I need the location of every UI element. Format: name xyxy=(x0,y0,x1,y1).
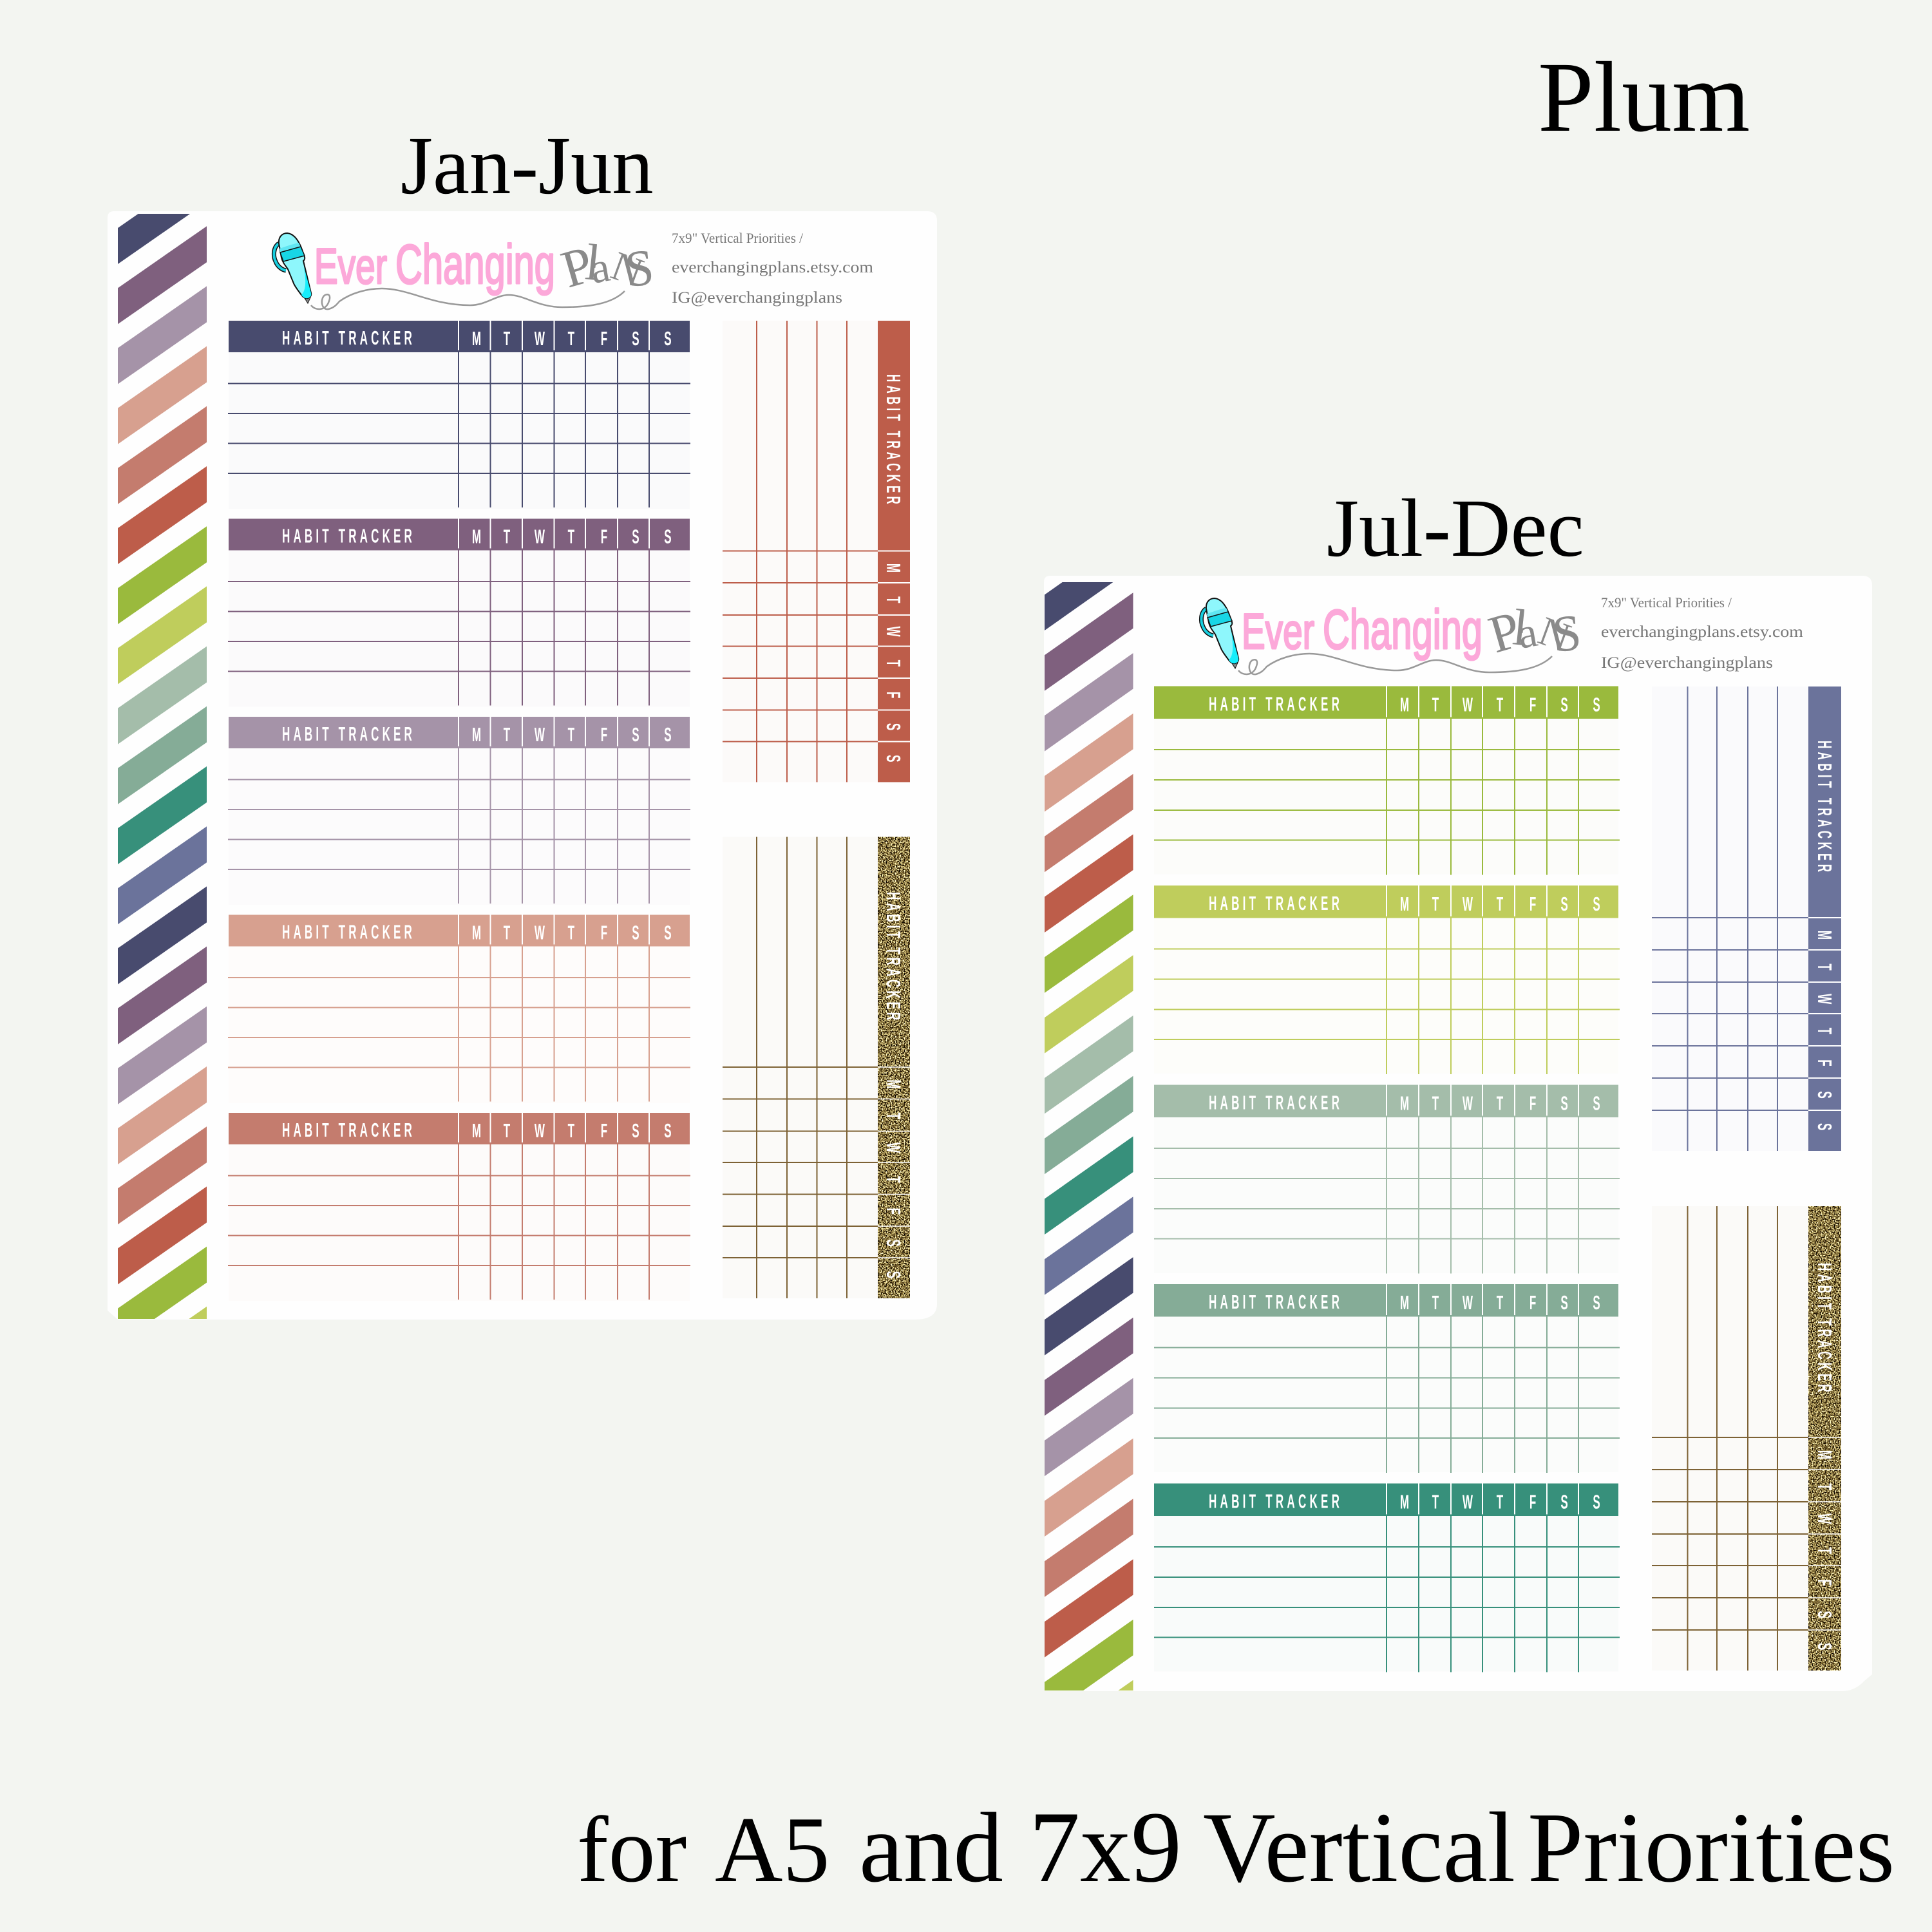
shop info text: everchangingplans.etsy.com xyxy=(672,259,874,276)
habit table: mauve: MTWTFSS xyxy=(472,724,672,746)
vertical habit tracker: slate: MTWTFSS xyxy=(1814,931,1835,1130)
heading: Jan-Jun: Jan-Jun xyxy=(401,119,654,211)
footer caption: Priorities xyxy=(1528,1792,1895,1903)
vertical habit tracker: gold glitter xyxy=(723,837,910,1298)
habit table: rose xyxy=(228,1113,690,1301)
shop info text: everchangingplans.etsy.com xyxy=(1601,623,1804,641)
habit table: sea green: MTWTFSS xyxy=(1400,1292,1600,1314)
habit table: teal: HABIT TRACKER xyxy=(1209,1490,1340,1513)
habit table: plum xyxy=(228,519,690,707)
habit table: sea green: HABIT TRACKER xyxy=(1209,1291,1340,1313)
habit table: navy: MTWTFSS xyxy=(472,328,672,350)
vertical habit tracker: red: HABIT TRACKER xyxy=(882,374,904,504)
habit table: green: MTWTFSS xyxy=(1400,694,1600,716)
shop info text: IG@everchangingplans xyxy=(1601,654,1773,672)
shop info text xyxy=(672,230,874,307)
logo word: Plans: a xyxy=(587,243,613,293)
habit table: blush xyxy=(228,914,690,1103)
shop info text: 7x9" Vertical Priorities / xyxy=(1601,594,1732,611)
logo swoosh xyxy=(1238,654,1552,674)
logo word: Ever: Ever xyxy=(1242,603,1314,659)
diagonal stripe column xyxy=(118,214,207,1319)
title: Plum: Plum xyxy=(1538,41,1750,153)
vertical habit tracker: gold glitter: HABIT TRACKER xyxy=(1814,1263,1835,1392)
habit table: mauve: HABIT TRACKER xyxy=(282,723,412,745)
logo word: Plans: P xyxy=(1482,600,1527,664)
vertical habit tracker: slate xyxy=(1652,687,1841,1151)
logo: Ever Changing Plans xyxy=(1201,598,1584,674)
habit table: navy: HABIT TRACKER xyxy=(282,327,412,349)
logo word: Ever: Ever xyxy=(314,238,387,294)
vertical habit tracker: gold glitter: MTWTFSS xyxy=(1814,1450,1835,1650)
logo word: Plans: P xyxy=(555,234,600,299)
habit table: sea green xyxy=(1154,1284,1620,1473)
habit table: blush: MTWTFSS xyxy=(472,922,672,944)
habit table: rose: MTWTFSS xyxy=(472,1120,672,1142)
shop info text xyxy=(1601,594,1804,672)
footer caption: 7x9 xyxy=(1029,1791,1182,1904)
vertical habit tracker: red xyxy=(723,321,910,782)
vertical habit tracker: red: MTWTFSS xyxy=(882,564,904,762)
logo swoosh xyxy=(311,289,625,309)
habit table: lime: MTWTFSS xyxy=(1400,893,1600,915)
vertical habit tracker: slate: HABIT TRACKER xyxy=(1814,741,1835,872)
logo word: Plans: l xyxy=(583,234,603,292)
logo word: Plans: N xyxy=(605,242,649,296)
vertical habit tracker: gold glitter xyxy=(1652,1206,1841,1671)
footer caption: A5 xyxy=(715,1797,829,1902)
habit table: green: HABIT TRACKER xyxy=(1209,693,1340,715)
logo word: Plans: l xyxy=(1510,599,1530,657)
vertical habit tracker: gold glitter: MTWTFSS xyxy=(882,1079,904,1278)
shop info text: IG@everchangingplans xyxy=(672,289,842,307)
heading: Jul-Dec: Jul-Dec xyxy=(1327,482,1584,574)
habit table: sage xyxy=(1154,1084,1620,1274)
logo: Ever Changing Plans xyxy=(274,233,656,309)
panel: Jan-Jun sticker sheet xyxy=(108,211,937,1320)
habit table: lime xyxy=(1154,886,1620,1074)
logo word: Changing: Changing xyxy=(395,234,555,296)
diagonal stripe column xyxy=(1045,582,1133,1690)
habit table: navy xyxy=(228,321,690,509)
habit table: green xyxy=(1154,687,1620,875)
footer caption: Vertical xyxy=(1203,1792,1515,1903)
shop info text: 7x9" Vertical Priorities / xyxy=(672,230,804,246)
habit table: mauve xyxy=(228,717,690,905)
logo word: Plans: S xyxy=(623,239,656,298)
habit table: blush: HABIT TRACKER xyxy=(282,921,412,943)
logo word: Plans: N xyxy=(1533,607,1577,661)
panel: Jul-Dec sticker sheet xyxy=(1044,576,1872,1691)
vertical habit tracker: gold glitter: HABIT TRACKER xyxy=(882,892,904,1020)
logo word: Changing: Changing xyxy=(1323,599,1482,661)
footer caption: for xyxy=(577,1797,687,1902)
habit table: sage: MTWTFSS xyxy=(1400,1092,1600,1115)
habit table: teal: MTWTFSS xyxy=(1400,1491,1600,1513)
habit table: plum: MTWTFSS xyxy=(472,526,672,548)
habit table: lime: HABIT TRACKER xyxy=(1209,893,1340,914)
icon: pen xyxy=(274,233,311,303)
icon: pen xyxy=(1201,598,1238,668)
habit table: teal xyxy=(1154,1484,1620,1672)
habit table: plum: HABIT TRACKER xyxy=(282,525,412,547)
logo word: Plans: a xyxy=(1514,609,1540,658)
habit table: rose: HABIT TRACKER xyxy=(282,1119,412,1141)
footer caption: and xyxy=(859,1792,1003,1903)
logo word: Plans: S xyxy=(1550,604,1584,663)
habit table: sage: HABIT TRACKER xyxy=(1209,1092,1340,1114)
